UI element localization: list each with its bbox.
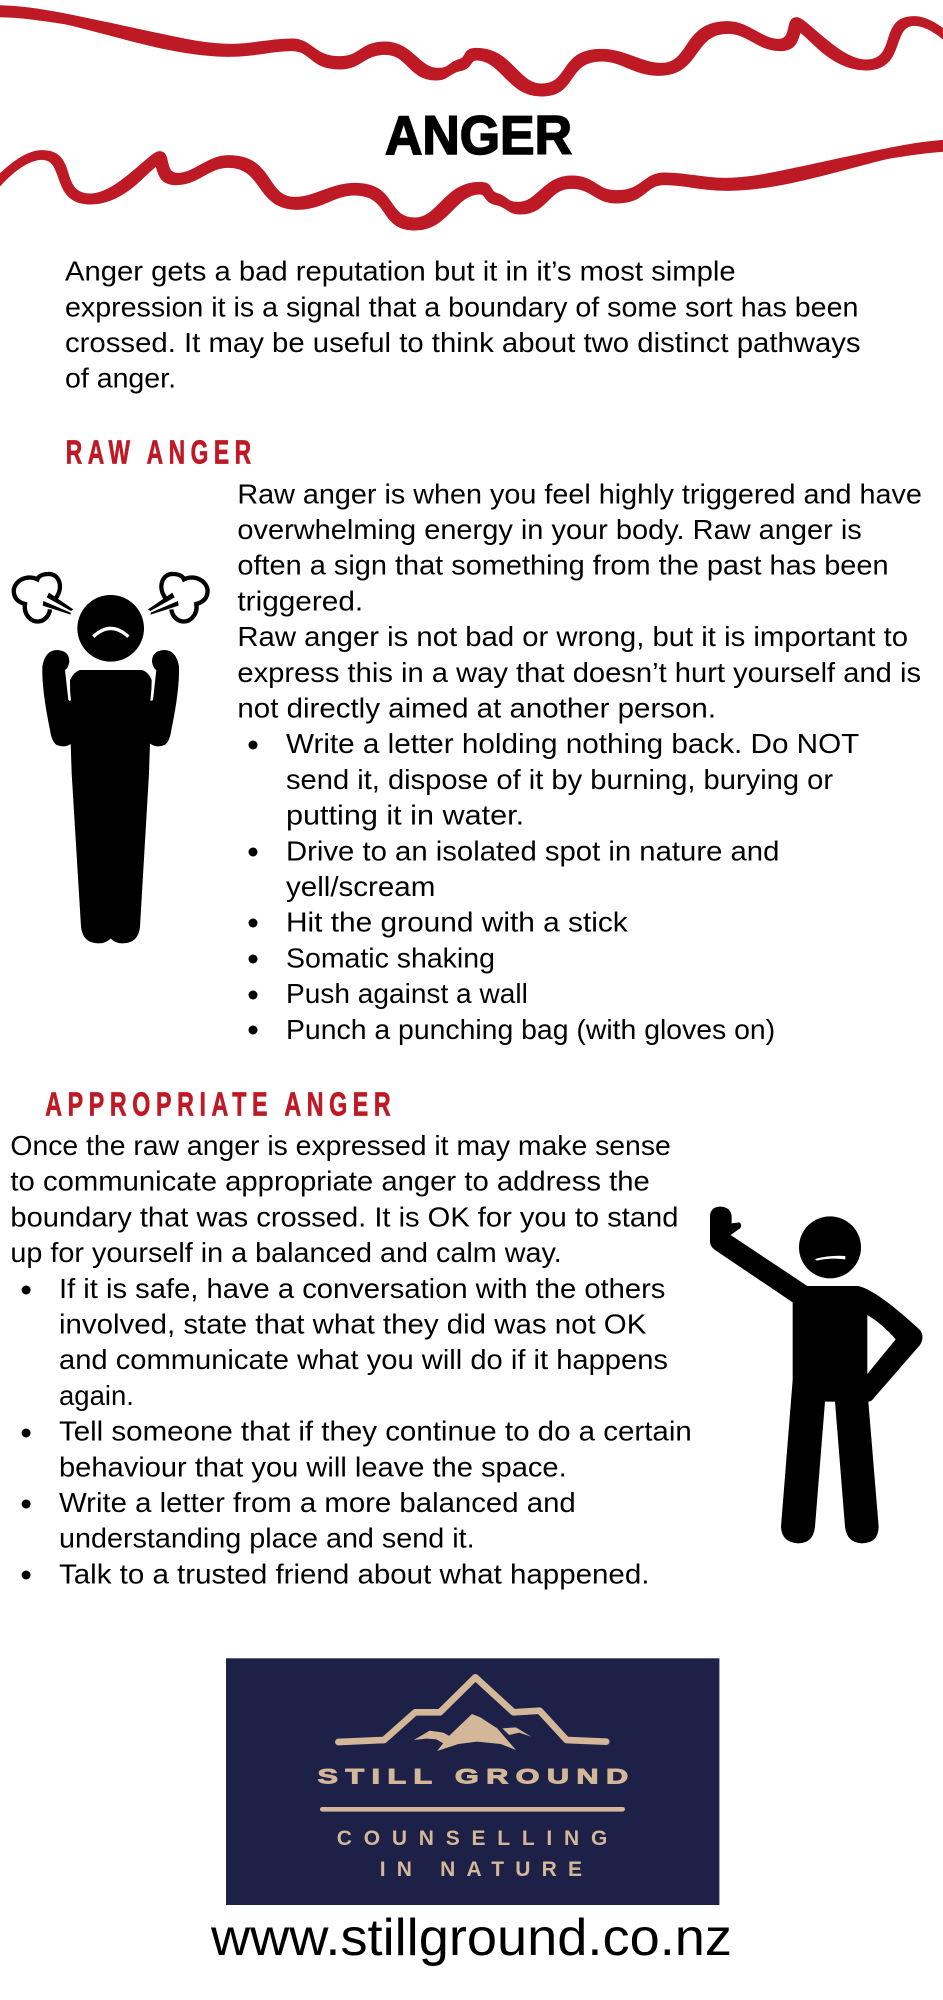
appropriate anger bullet list: Talk to a trusted friend about what happened.: [59, 1558, 649, 1589]
appropriate anger bullet list: behaviour that you will leave the space.: [59, 1451, 567, 1482]
raw anger description: often a sign that something from the past has been: [237, 550, 889, 581]
raw anger bullet list: Write a letter holding nothing back. Do NOT: [286, 728, 859, 759]
appropriate anger description: [10, 1130, 678, 1268]
raw anger bullet list: Punch a punching bag (with gloves on): [286, 1014, 775, 1045]
icon: assertive figure with raised hand: [710, 1207, 922, 1543]
appropriate anger bullet list: and communicate what you will do if it happens: [59, 1344, 668, 1375]
appropriate anger bullet list: Write a letter from a more balanced and: [59, 1487, 576, 1518]
appropriate anger bullet list: Tell someone that if they continue to do a certain: [59, 1416, 692, 1447]
logo panel: Still Ground: STILL GROUND: [318, 1765, 636, 1788]
appropriate anger bullet list: [22, 1273, 692, 1589]
appropriate anger bullet list: involved, state that what they did was not OK: [59, 1309, 647, 1339]
website url: www.stillground.co.nz: [210, 1909, 732, 1967]
intro text block: Anger gets a bad reputation but it in it’s most simple: [65, 256, 736, 287]
raw anger description: [237, 478, 922, 723]
raw anger bullet list: [248, 728, 859, 1045]
heading: appropriate anger: APPROPRIATE ANGER: [45, 1085, 396, 1122]
appropriate anger description: Once the raw anger is expressed it may make sense: [10, 1130, 671, 1161]
appropriate anger description: boundary that was crossed. It is OK for you to stand: [10, 1201, 678, 1232]
intro text block: [65, 256, 861, 394]
logo panel: Still Ground: [226, 1658, 719, 1905]
raw anger bullet list: send it, dispose of it by burning, burying or: [286, 764, 833, 795]
heading: raw anger: RAW ANGER: [66, 434, 257, 471]
appropriate anger description: up for yourself in a balanced and calm way.: [10, 1237, 562, 1268]
title: ANGER: [385, 105, 572, 166]
logo panel: Still Ground: IN NATURE: [380, 1858, 582, 1881]
top red wavy line: [0, 5, 943, 96]
appropriate anger bullet list: If it is safe, have a conversation with the others: [59, 1273, 665, 1304]
raw anger description: triggered.: [237, 585, 363, 616]
intro text block: crossed. It may be useful to think about two distinct pathways: [65, 327, 861, 358]
appropriate anger bullet list: understanding place and send it.: [59, 1523, 475, 1554]
raw anger description: Raw anger is not bad or wrong, but it is important to: [237, 621, 908, 652]
raw anger description: express this in a way that doesn’t hurt yourself and is: [237, 657, 921, 688]
icon: mountains: [338, 1677, 606, 1751]
raw anger description: Raw anger is when you feel highly triggered and have: [237, 478, 922, 509]
icon: angry figure with steam: [14, 574, 208, 943]
raw anger description: not directly aimed at another person.: [237, 693, 716, 723]
raw anger bullet list: putting it in water.: [286, 800, 524, 831]
appropriate anger bullet list: again.: [59, 1380, 134, 1411]
raw anger description: overwhelming energy in your body. Raw anger is: [237, 514, 862, 545]
raw anger bullet list: Somatic shaking: [286, 942, 495, 973]
raw anger bullet list: Hit the ground with a stick: [286, 907, 629, 938]
bottom red wavy line: [0, 140, 943, 230]
raw anger bullet list: yell/scream: [286, 871, 435, 902]
raw anger bullet list: Push against a wall: [286, 978, 528, 1009]
raw anger bullet list: Drive to an isolated spot in nature and: [286, 835, 779, 866]
intro text block: of anger.: [65, 363, 176, 394]
intro text block: expression it is a signal that a boundary of some sort has been: [65, 291, 858, 322]
appropriate anger description: to communicate appropriate anger to address the: [10, 1166, 650, 1197]
logo panel: Still Ground: COUNSELLING: [337, 1827, 607, 1850]
